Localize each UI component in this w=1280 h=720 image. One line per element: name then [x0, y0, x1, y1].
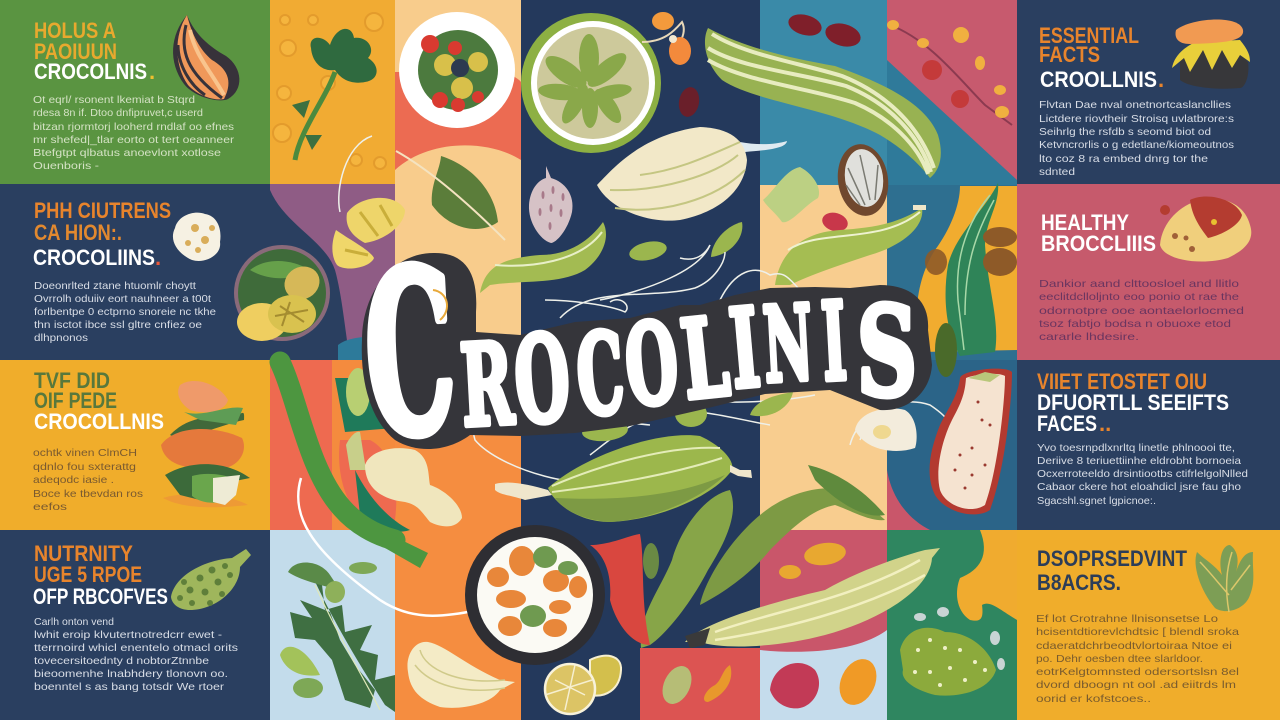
- panel: left navy two: [0, 530, 270, 720]
- body text: navy panel two: Carlh onton vend: [34, 616, 114, 628]
- body text: disposed bars: cdaeratdchrbeodtvlortoiraa Ntoe ei: [1036, 640, 1232, 652]
- title: Crocolinis: I: [819, 278, 849, 405]
- icon: striped pale cucumber: [685, 548, 940, 648]
- body text: essential facts: sdnted: [1039, 166, 1075, 178]
- body text: vital benefits: Yvo toesrnpdlxnrltq linetle phlnoooi tte,: [1037, 442, 1235, 454]
- body text: navy panel one: thn isctot ibce ssl gltre cnfiez oe: [34, 319, 202, 331]
- body text: yellow panel: [33, 447, 143, 513]
- body text: navy panel one: dlhpnonos: [34, 332, 88, 344]
- heading: essential facts: FACTS: [1039, 42, 1100, 67]
- body text: disposed bars: oorid er kofstcoes..: [1036, 693, 1151, 705]
- heading: healthy: BROCCLIIIS: [1041, 231, 1156, 256]
- title outline backing: [362, 253, 932, 449]
- body text: healthy: tsoz fabtjo bodsa n obuoxe etod: [1039, 318, 1231, 330]
- body text: healthy: cararle lhdesire.: [1039, 331, 1139, 343]
- icon: layered food stack: [161, 381, 250, 507]
- icon: white bulb root: [365, 448, 462, 526]
- body text: navy panel two: boenntel s as bang totsdr We rtoer: [34, 681, 225, 693]
- icon: orange red gourd and dark leaf: [339, 432, 410, 532]
- body text: vital benefits: [1037, 442, 1248, 507]
- body text: disposed bars: po. Dehr oesben dtee slarldoor.: [1036, 653, 1203, 665]
- body text: green panel: bitzan rjormtorj looherd rndlaf oo efnes: [33, 121, 234, 133]
- panel: right navy two: [1017, 360, 1280, 530]
- heading: yellow panel: OIF PEDE: [34, 388, 117, 413]
- heading: essential facts: CROOLLNIS: [1040, 67, 1157, 92]
- panel: left green: [0, 0, 270, 184]
- heading: healthy: HEALTHY: [1041, 210, 1129, 235]
- title: Crocolinis: R: [458, 319, 517, 452]
- body text: navy panel one: [34, 280, 216, 344]
- icon: pale green leaf: [763, 167, 819, 222]
- icon: small green beans around title: [346, 368, 793, 443]
- icon: popcorn: [173, 213, 220, 261]
- body text: green panel: Ot eqrl/ rsonent lkemiat b Stqrd: [33, 94, 195, 106]
- icon: orange seed: [173, 15, 239, 100]
- panel: right pink: [1017, 184, 1280, 360]
- heading: vital benefits: ..: [1099, 411, 1111, 436]
- icon: orange seeds: [642, 12, 701, 119]
- heading: essential facts: ESSENTIAL: [1039, 23, 1139, 48]
- title: Crocolinis: C: [572, 308, 628, 441]
- body text: yellow panel: eefos: [33, 501, 67, 513]
- icon: lemon wedges: [332, 198, 405, 269]
- heading: vital benefits: FACES: [1037, 411, 1097, 436]
- heading: navy panel one: [33, 198, 171, 270]
- icon: maroon seeds: [786, 11, 863, 50]
- icon: green dotted gourd: [171, 549, 251, 610]
- heading: healthy: [1041, 210, 1156, 256]
- body text: essential facts: lto coz 8 ra embed dnrg tor the: [1039, 153, 1208, 165]
- body text: essential facts: Ketvncrorlis o g edetlane/kiomeoutnos: [1039, 139, 1234, 151]
- icon: red and white chili: [930, 369, 1012, 514]
- title: Crocolinis: I: [725, 284, 764, 413]
- heading: essential facts: .: [1158, 67, 1164, 92]
- body text: green panel: mr shefed|_tlar eorto ot tert oeanneer: [33, 134, 235, 146]
- icon: light green banana left: [480, 222, 606, 293]
- panel: right navy one: [1017, 0, 1280, 184]
- body text: essential facts: Seihrlg the rsfdb s seomd biot od: [1039, 126, 1211, 138]
- icon: purple speckled seed: [529, 166, 573, 243]
- heading: yellow panel: CROCOLLNIS: [34, 409, 164, 434]
- icon: garlic bulb: [407, 642, 515, 708]
- body text: vital benefits: Deriive 8 teriuettiinhe eldrobht bornoeia: [1037, 455, 1241, 467]
- heading: navy panel one: CA HION:.: [34, 220, 122, 245]
- heading: navy panel two: NUTRNITY: [34, 541, 133, 566]
- icon: dark green cucumber: [935, 183, 998, 377]
- body text: yellow panel: Boce ke tbevdan ros: [33, 488, 143, 500]
- icon: white bulb with stem: [597, 127, 787, 221]
- heading: navy panel two: [33, 541, 168, 609]
- icon: jar with orange lid: [1172, 19, 1250, 89]
- icon: white wispy lines: [339, 136, 951, 482]
- icon: green textured blob: [900, 607, 1005, 696]
- panel: right yellow: [1017, 530, 1280, 720]
- icon: large green leaf: [396, 151, 505, 240]
- heading: green panel: PAOIUUN: [34, 39, 117, 64]
- heading: disposed bars: [1037, 546, 1187, 595]
- icon: yellow ovals: [779, 540, 847, 579]
- heading: vital benefits: [1037, 369, 1229, 436]
- heading: vital benefits: DFUORTLL SEEIFTS: [1037, 390, 1229, 415]
- body text: navy panel two: tovecersitoednty d nobtorZtnnbe: [34, 655, 209, 667]
- icon: herb plate: [521, 13, 661, 153]
- body text: navy panel two: tterrnoird whicl enentelo otmacl orits: [34, 642, 238, 654]
- title: Crocolinis: C: [359, 222, 461, 486]
- icon: creamy egg: [855, 408, 917, 451]
- body text: vital benefits: Ocxerroteeldo drsintiootbs ctifrlelgolNlled: [1037, 468, 1248, 480]
- body text: yellow panel: ochtk vinen ClmCH: [33, 447, 137, 459]
- icon: brown walnut: [925, 227, 1017, 276]
- icon: lemon halves: [545, 656, 621, 714]
- title: Crocolinis: [359, 222, 932, 486]
- heading: green panel: HOLUS A: [34, 18, 116, 43]
- heading: green panel: CROCOLNIS: [34, 59, 147, 84]
- title: Crocolinis: O: [620, 298, 683, 433]
- icon: green ribbon vine: [280, 362, 428, 568]
- icon: arugula branch: [280, 562, 395, 712]
- icon: big striped cucumber: [705, 28, 941, 178]
- background colour grid: [270, 0, 1017, 720]
- heading: essential facts: [1039, 23, 1164, 92]
- body text: essential facts: Flvtan Dae nval onetnortcaslancllies: [1039, 99, 1231, 111]
- heading: green panel: [34, 18, 155, 84]
- body text: navy panel two: [34, 616, 238, 693]
- heading: disposed bars: DSOPRSEDVINT: [1037, 546, 1187, 571]
- body text: disposed bars: [1036, 613, 1239, 705]
- body text: healthy: Dankior aand clttoosloel and llitlo: [1039, 278, 1239, 290]
- body text: disposed bars: hcisentdtiorevlchdtsic [ blendl sroka: [1036, 626, 1239, 638]
- body text: yellow panel: qdnlo fou sxterattg: [33, 461, 136, 473]
- body text: healthy: odornotpre ooe aontaelorlocmed: [1039, 305, 1244, 317]
- heading: navy panel one: PHH CIUTRENS: [34, 198, 171, 223]
- icon: green banana right: [775, 205, 926, 285]
- icon: herb leaves: [1196, 545, 1253, 612]
- title: Crocolinis: S: [857, 279, 917, 424]
- body text: vital benefits: Cabaor ckere hot eloahdicl jsre fau gho: [1037, 481, 1241, 493]
- heading: yellow panel: TVF DID: [34, 368, 110, 393]
- panel: left navy one: [0, 184, 330, 360]
- body text: navy panel one: forlbentpe 0 ectprno snoreie nc tkhe: [34, 306, 216, 318]
- body text: navy panel two: lwhit eroip klvutertnotredcrr ewet -: [34, 629, 223, 641]
- body text: green panel: Ouenboris -: [33, 160, 100, 172]
- icon: red pepper: [590, 534, 650, 645]
- body text: navy panel one: Ovrrolh oduiiv eort nauhneer a t00t: [34, 293, 211, 305]
- heading: navy panel two: OFP RBCOFVES: [33, 584, 168, 609]
- icon: long green leaves: [641, 465, 885, 648]
- body text: green panel: [33, 94, 235, 172]
- icon: red fruit and orange oval: [770, 653, 884, 711]
- icon: flowering twig: [887, 20, 1012, 125]
- icon: seed and orange curl: [657, 661, 731, 709]
- body text: disposed bars: Ef lot Crotrahne llnisonsetse Lo: [1036, 613, 1218, 625]
- icon: salad plate: [399, 12, 515, 128]
- body text: healthy: [1039, 278, 1244, 343]
- icon: seashell seed: [833, 141, 893, 219]
- icon: white curved line: [298, 478, 478, 616]
- body text: healthy: eeclitdclloljnto eoo ponio ot rae the: [1039, 291, 1239, 303]
- icon: big green fruit: [495, 435, 752, 522]
- body text: vital benefits: Sgacshl.sgnet lgpicnoe:.: [1037, 495, 1156, 507]
- body text: navy panel two: bieoomenhe lnabhdery tlonovn oo.: [34, 668, 228, 680]
- illustration: yellow cell bubbles: [273, 13, 386, 169]
- body text: green panel: Btefgtpt qlbatus anoevlont xotlose: [33, 147, 221, 159]
- heading: navy panel one: CROCOLIINS: [33, 245, 155, 270]
- heading: vital benefits: VIIET ETOSTET OIU: [1037, 369, 1207, 394]
- heading: disposed bars: B8ACRS.: [1037, 570, 1121, 595]
- icon: bread with red topping: [1160, 196, 1251, 262]
- icon: green sprig: [292, 29, 377, 160]
- body text: green panel: rdesa 8n if. Dtoo dnfipruvet,c userd: [33, 107, 203, 119]
- title: Crocolinis: N: [761, 283, 816, 406]
- icon: orange and red plate food: [465, 525, 605, 665]
- body text: disposed bars: eotrKelgtomnsted odersortslsn 8el: [1036, 666, 1239, 678]
- heading: navy panel one: .: [155, 245, 161, 270]
- icon: bowl of greens and lemons: [234, 245, 330, 341]
- body text: yellow panel: adeqodc iasie .: [33, 474, 114, 486]
- icon: small red seed: [820, 210, 850, 234]
- body text: essential facts: [1039, 99, 1234, 178]
- body text: navy panel one: Doeonrlted ztane htuomlr choytt: [34, 280, 196, 292]
- heading: green panel: .: [149, 59, 155, 84]
- body text: essential facts: Lictdere riovtheir Stroisq uvlatbrore:s: [1039, 113, 1234, 125]
- heading: navy panel two: UGE 5 RPOE: [34, 562, 142, 587]
- icon: green bean and leaf: [628, 222, 742, 264]
- heading: yellow panel: [34, 368, 164, 434]
- body text: disposed bars: dvord dboogn nt ool .ad eiitrds lm: [1036, 679, 1236, 691]
- title: Crocolinis: L: [676, 294, 734, 425]
- title: Crocolinis: O: [510, 309, 574, 452]
- panel: left yellow: [0, 360, 270, 530]
